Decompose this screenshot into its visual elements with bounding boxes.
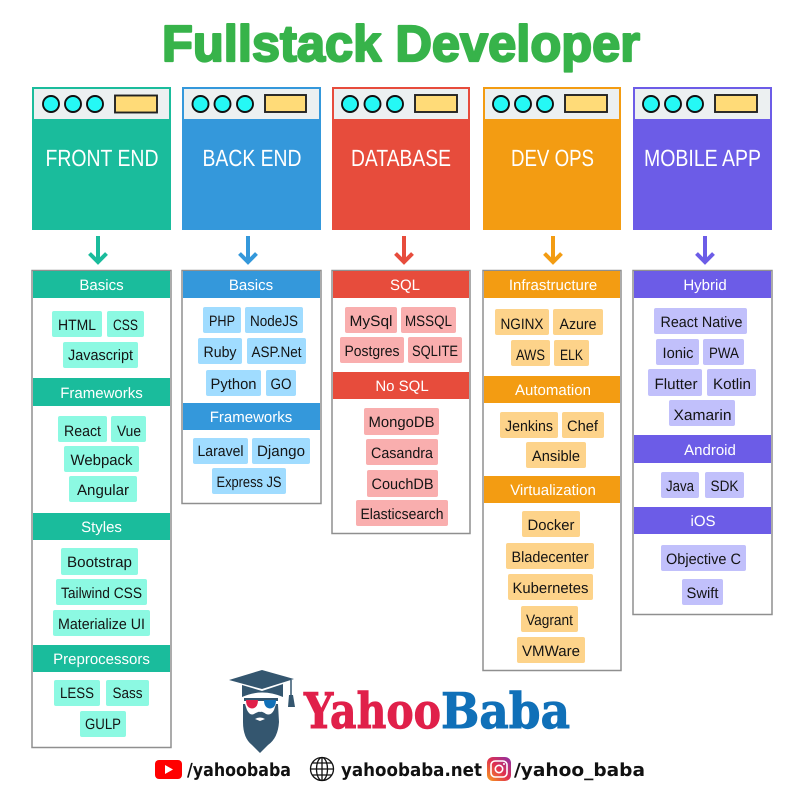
tags: infrastructure — [495, 309, 603, 366]
tags: frameworks: Webpack — [70, 452, 133, 469]
card: dev ops — [483, 87, 621, 230]
tags: preprocessors — [54, 680, 149, 737]
heading: automation: Automation — [515, 382, 591, 399]
heading: infrastructure — [484, 271, 620, 298]
panel: back end — [182, 270, 321, 504]
heading: basics: Basics — [229, 277, 273, 294]
tags: hybrid: Kotlin — [713, 376, 751, 393]
tags: no sql: Casandra — [371, 445, 434, 462]
heading: frameworks: Frameworks — [210, 409, 292, 426]
heading: hybrid — [634, 271, 771, 298]
tags: hybrid: Flutter — [654, 376, 698, 393]
tags: frameworks — [58, 416, 146, 502]
logo wordmark: Baba — [441, 682, 570, 740]
tags: basics: Python — [210, 376, 256, 393]
heading: styles: Styles — [81, 519, 122, 536]
social: instagram handle: /yahoo_baba — [514, 760, 645, 781]
heading: virtualization: Virtualization — [510, 482, 596, 499]
tags: basics: Ruby — [204, 344, 237, 361]
tags: hybrid: Xamarin — [674, 407, 732, 424]
tags: frameworks: Django — [257, 443, 305, 460]
tags: hybrid: Ionic — [662, 345, 694, 362]
heading: frameworks: Frameworks — [60, 385, 143, 402]
panel: dev ops — [483, 270, 621, 670]
tags: styles: Materialize UI — [58, 616, 145, 633]
tags: automation: Chef — [567, 418, 599, 435]
heading: preprocessors — [33, 645, 170, 672]
card: back end: BACK END — [202, 145, 302, 171]
arrow: mobile app — [696, 236, 714, 262]
tags: automation — [500, 412, 604, 468]
tags: frameworks: Vue — [117, 423, 141, 440]
tags: sql — [340, 307, 462, 363]
tags: sql: MySql — [350, 313, 392, 330]
card: front end — [32, 87, 171, 230]
heading: basics — [33, 271, 170, 298]
social: website: yahoobaba.net — [341, 760, 482, 781]
tags: virtualization: Vagrant — [526, 612, 574, 629]
heading: basics: Basics — [79, 277, 124, 294]
tags: no sql: CouchDB — [372, 476, 434, 493]
tags: infrastructure: AWS — [516, 347, 545, 364]
tags: hybrid — [648, 308, 756, 426]
icon: youtube — [155, 760, 182, 779]
tags: virtualization: Bladecenter — [512, 549, 588, 566]
card: back end — [182, 87, 321, 230]
tags: styles — [53, 548, 150, 636]
tags: basics — [198, 307, 306, 396]
tags: frameworks: Laravel — [198, 443, 244, 460]
tags: ios — [661, 545, 746, 605]
card: database — [332, 87, 470, 230]
tags: sql: SQLITE — [412, 343, 458, 360]
logo wordmark: Yahoo — [303, 682, 441, 740]
tags: frameworks — [193, 438, 310, 494]
social: youtube handle: /yahoobaba — [187, 760, 291, 781]
heading: automation — [484, 376, 620, 403]
logo wordmark — [303, 682, 570, 740]
card: database: DATABASE — [351, 145, 451, 171]
tags: basics: Javascript — [68, 347, 134, 364]
heading: basics — [183, 271, 320, 298]
heading: no sql: No SQL — [375, 378, 429, 395]
tags: frameworks: Angular — [77, 482, 129, 499]
heading: frameworks — [183, 403, 320, 430]
tags: basics: HTML — [58, 317, 96, 334]
arrow: back end — [240, 236, 256, 262]
heading: android: Android — [684, 442, 736, 459]
tags: ios: Objective C — [666, 551, 741, 568]
tags: infrastructure: NGINX — [500, 316, 544, 333]
tags: hybrid: React Native — [660, 314, 742, 331]
heading: no sql — [333, 372, 469, 399]
tags: styles: Bootstrap — [67, 554, 132, 571]
tags: no sql — [356, 408, 448, 526]
card: front end: FRONT END — [46, 145, 158, 171]
heading: hybrid: Hybrid — [683, 277, 727, 294]
tags: infrastructure: Azure — [560, 316, 596, 333]
heading: sql: SQL — [390, 277, 420, 294]
panel: database — [332, 270, 470, 534]
heading: ios — [634, 507, 771, 534]
card: dev ops: DEV OPS — [511, 145, 594, 171]
tags: basics: CSS — [113, 317, 138, 334]
card: mobile app — [633, 87, 772, 230]
tags: virtualization: Docker — [528, 517, 575, 534]
tags: virtualization: VMWare — [522, 643, 580, 660]
tags: no sql: MongoDB — [368, 414, 434, 431]
heading: infrastructure: Infrastructure — [509, 277, 597, 294]
tags: automation: Jenkins — [505, 418, 553, 435]
tags: sql: MSSQL — [405, 313, 452, 330]
heading: preprocessors: Preprocessors — [53, 651, 150, 668]
card: mobile app: MOBILE APP — [644, 145, 761, 171]
icon: bearded graduate mascot — [229, 670, 295, 753]
heading: styles — [33, 513, 170, 540]
heading: android — [634, 435, 771, 463]
heading: sql — [333, 271, 469, 298]
tags: frameworks: Express JS — [216, 474, 282, 491]
tags: styles: Tailwind CSS — [61, 585, 142, 602]
icon: instagram — [487, 757, 511, 781]
tags: basics: GO — [270, 376, 292, 393]
tags: no sql: Elasticsearch — [360, 506, 444, 523]
tags: virtualization — [506, 511, 594, 663]
tags: infrastructure: ELK — [560, 347, 583, 364]
tags: automation: Ansible — [532, 448, 580, 465]
tags: basics — [52, 311, 144, 368]
panel: mobile app — [633, 270, 772, 614]
panel: front end — [32, 270, 171, 748]
tags: basics: ASP.Net — [252, 344, 302, 361]
heading: ios: iOS — [690, 513, 716, 530]
tags: preprocessors: LESS — [60, 685, 94, 702]
heading: frameworks — [33, 378, 170, 406]
tags: ios: Swift — [686, 585, 719, 602]
heading: virtualization — [484, 476, 620, 503]
tags: hybrid: PWA — [709, 345, 739, 362]
arrow: dev ops — [544, 236, 562, 262]
tags: android: SDK — [710, 478, 738, 495]
tags: frameworks: React — [64, 423, 102, 440]
tags: basics: NodeJS — [250, 313, 298, 330]
tags: android — [661, 472, 744, 498]
tags: virtualization: Kubernetes — [512, 580, 588, 597]
arrow: front end — [90, 236, 106, 262]
title: Fullstack Developer — [162, 15, 640, 72]
tags: android: Java — [666, 478, 695, 495]
icon: globe — [310, 758, 334, 780]
tags: preprocessors: Sass — [112, 685, 142, 702]
tags: basics: PHP — [209, 313, 235, 330]
arrow: database — [396, 236, 412, 262]
tags: sql: Postgres — [344, 343, 400, 360]
tags: preprocessors: GULP — [85, 716, 121, 733]
